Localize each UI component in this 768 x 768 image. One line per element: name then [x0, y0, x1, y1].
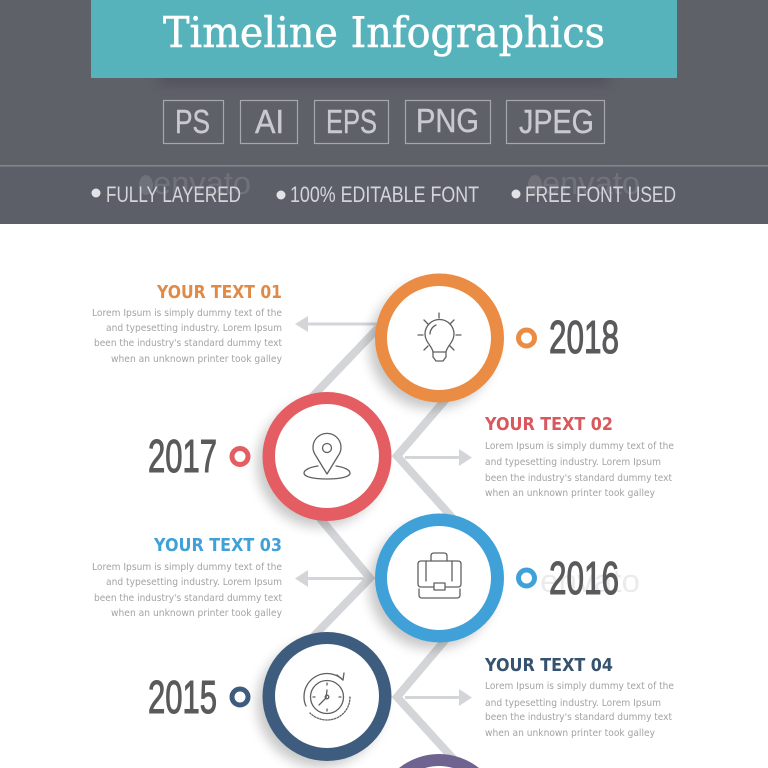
text block: item 04: when an unknown printer took galley [485, 728, 655, 739]
format badges: JPEG [519, 103, 594, 140]
arrow: item 03 [295, 570, 364, 587]
text block: item 03 [92, 536, 282, 619]
text block: item 03: and typesetting industry. Lorem Ipsum [106, 577, 282, 588]
format badges: AI [255, 103, 284, 140]
feature list: FREE FONT USED [525, 182, 676, 207]
format badges: EPS [326, 103, 377, 140]
circle: item 04 navy [257, 632, 392, 767]
title banner: Timeline Infographics [163, 8, 605, 57]
circle: item 05 purple [399, 754, 479, 768]
icon: stopwatch [304, 673, 350, 720]
text block: item 01: and typesetting industry. Lorem Ipsum [106, 323, 282, 334]
icon: light bulb [418, 313, 461, 361]
circle: item 01 orange [369, 274, 504, 409]
text block: item 01 [92, 283, 282, 365]
text block: item 04: been the industry's standard dummy text [485, 712, 672, 723]
text block: item 01: when an unknown printer took galley [111, 354, 282, 365]
text block: item 01: YOUR TEXT 01 [156, 283, 282, 303]
icon: map pin [304, 433, 350, 479]
text block: item 03: when an unknown printer took galley [111, 608, 282, 619]
text block: item 03: been the industry's standard dummy text [94, 593, 282, 604]
arrow: item 01 [295, 316, 378, 332]
text block: item 02: YOUR TEXT 02 [484, 415, 613, 435]
watermark: beside 2016: envato [540, 563, 640, 599]
text block: item 02: and typesetting industry. Lorem Ipsum [485, 457, 661, 468]
zigzag connector lines [290, 328, 458, 764]
watermark: header right: envato [542, 165, 640, 201]
text block: item 02 [484, 415, 674, 499]
text block: item 04 [484, 656, 674, 739]
header band [0, 0, 768, 224]
watermark: header left: envato [153, 165, 251, 201]
icon: briefcase [418, 553, 461, 598]
text block: item 04: and typesetting industry. Lorem Ipsum [485, 698, 661, 709]
circle: item 02 red [257, 392, 392, 527]
title banner [91, 0, 677, 84]
arrow: item 02 [405, 449, 472, 466]
format badges: PNG [416, 102, 479, 139]
text block: item 01: Lorem Ipsum is simply dummy text of the [92, 308, 282, 319]
year: 2016 [518, 552, 619, 604]
text block: item 03: Lorem Ipsum is simply dummy text of the [92, 562, 282, 573]
year: 2016: 2016 [549, 552, 619, 604]
feature list: 100% EDITABLE FONT [290, 182, 479, 207]
format badges: PS [175, 103, 210, 140]
arrow: item 04 [405, 689, 472, 706]
text block: item 03: YOUR TEXT 03 [153, 536, 282, 556]
text block: item 04: Lorem Ipsum is simply dummy text of the [485, 681, 674, 692]
format badges [164, 100, 604, 144]
text block: item 02: Lorem Ipsum is simply dummy text of the [485, 441, 674, 452]
year: 2015: 2015 [148, 671, 217, 723]
circle: item 03 blue [369, 514, 504, 649]
year: 2018 [518, 311, 619, 363]
text block: item 02: been the industry's standard dummy text [485, 473, 672, 484]
feature list: FULLY LAYERED [106, 182, 241, 207]
year: 2017: 2017 [148, 430, 217, 482]
year: 2018: 2018 [549, 311, 619, 363]
text block: item 01: been the industry's standard dummy text [94, 338, 282, 349]
text block: item 04: YOUR TEXT 04 [484, 656, 613, 676]
text block: item 02: when an unknown printer took galley [485, 488, 655, 499]
feature list [92, 182, 676, 207]
